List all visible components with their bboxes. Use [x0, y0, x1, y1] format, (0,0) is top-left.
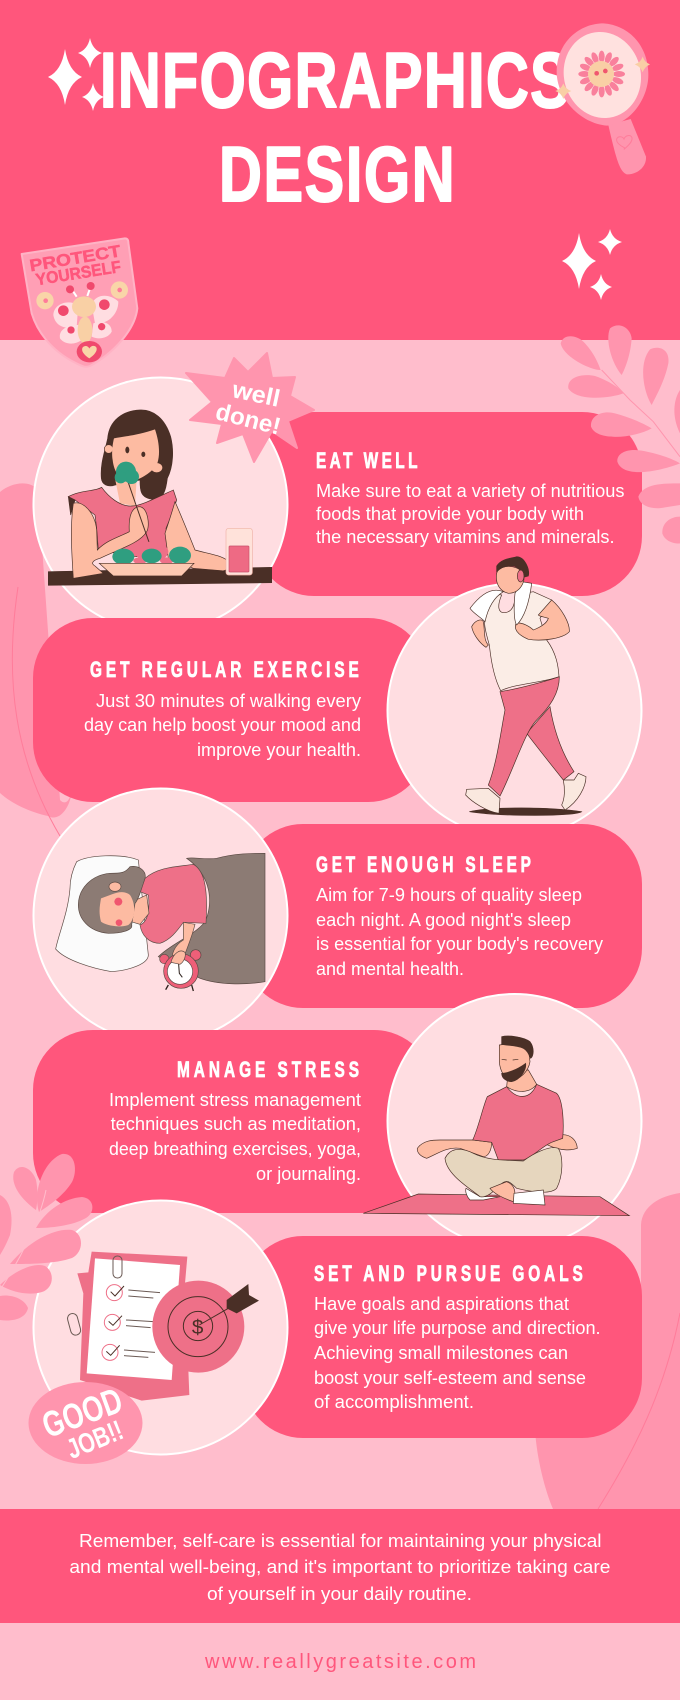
woman eating [48, 410, 272, 585]
footer text: and mental well-being, and it's important to prioritize taking care [69, 1556, 610, 1577]
circle: stress illustration [363, 994, 642, 1248]
exercise body: Just 30 minutes of walking every [96, 691, 361, 711]
sparkles: header right [562, 229, 622, 300]
goals body: boost your self-esteem and sense [314, 1368, 586, 1388]
stress body: or journaling. [256, 1164, 361, 1184]
exercise title: GET REGULAR EXERCISE [90, 658, 359, 683]
website url: www.reallygreatsite.com [204, 1651, 476, 1673]
exercise body [84, 691, 361, 760]
sticker: well done: well [229, 376, 282, 413]
stress body: Implement stress management [109, 1090, 361, 1110]
sticker: good job: GOOD [37, 1379, 128, 1446]
icon: hand mirror with flower [554, 23, 651, 174]
sticker: well done [186, 353, 314, 462]
dollar sign: $ [192, 1316, 204, 1339]
sleep body: each night. A good night's sleep [316, 910, 571, 930]
sleep body [316, 885, 603, 979]
sticker: protect yourself badge: PROTECT [28, 241, 122, 275]
sleep title: GET ENOUGH SLEEP [316, 853, 531, 878]
eat well title: EAT WELL [316, 449, 417, 474]
sticker: well done: done! [213, 398, 283, 441]
sparkles: title left [48, 38, 104, 111]
sprig: top right leaves [561, 325, 680, 543]
eat well body: the necessary vitamins and minerals. [316, 527, 614, 547]
eat well body: foods that provide your body with [316, 504, 584, 524]
sticker: protect yourself badge: YOURSELF [34, 257, 122, 289]
stress body [109, 1090, 361, 1184]
sleep body: Aim for 7-9 hours of quality sleep [316, 885, 582, 905]
goals body: Achieving small milestones can [314, 1343, 568, 1363]
man meditating [363, 1036, 629, 1216]
eat well body: Make sure to eat a variety of nutritious [316, 481, 624, 501]
woman sleeping [56, 853, 265, 991]
sprig: bottom left leaves [0, 1154, 92, 1320]
card: get regular exercise [33, 618, 428, 802]
sticker: protect yourself badge [22, 238, 137, 367]
card: set and pursue goals [243, 1236, 642, 1438]
exercise body: improve your health. [197, 740, 361, 760]
title: infographics: INFOGRAPHICS [100, 36, 570, 124]
footer text: Remember, self-care is essential for maintaining your physical [79, 1530, 602, 1551]
right background blob [535, 1193, 680, 1509]
woman walking [466, 557, 586, 815]
card: get enough sleep [243, 824, 642, 1008]
header band [0, 0, 680, 340]
goals body [314, 1294, 601, 1412]
footer text: of yourself in your daily routine. [207, 1583, 472, 1604]
sticker: good job: JOB!! [62, 1414, 128, 1465]
eat well body [316, 481, 624, 547]
stress body: techniques such as meditation, [111, 1114, 361, 1134]
goals body: Have goals and aspirations that [314, 1294, 569, 1314]
circle: exercise illustration [388, 557, 642, 838]
circle: eat well illustration [34, 378, 288, 632]
goals title: SET AND PURSUE GOALS [314, 1262, 583, 1287]
title: design: DESIGN [219, 130, 455, 218]
exercise body: day can help boost your mood and [84, 715, 361, 735]
circle: sleep illustration [34, 788, 288, 1042]
checklist and target [66, 1252, 259, 1401]
sleep body: is essential for your body's recovery [316, 934, 603, 954]
circle: goals illustration [34, 1200, 288, 1454]
sleep body: and mental health. [316, 959, 464, 979]
left background blob [0, 483, 72, 836]
footer text [69, 1530, 610, 1604]
card: manage stress [33, 1030, 434, 1213]
stress body: deep breathing exercises, yoga, [109, 1139, 361, 1159]
footer band [0, 1509, 680, 1623]
sticker: good job [28, 1379, 142, 1465]
stress title: MANAGE STRESS [177, 1058, 359, 1083]
goals body: give your life purpose and direction. [314, 1318, 601, 1338]
goals body: of accomplishment. [314, 1392, 474, 1412]
card: eat well [254, 412, 642, 596]
